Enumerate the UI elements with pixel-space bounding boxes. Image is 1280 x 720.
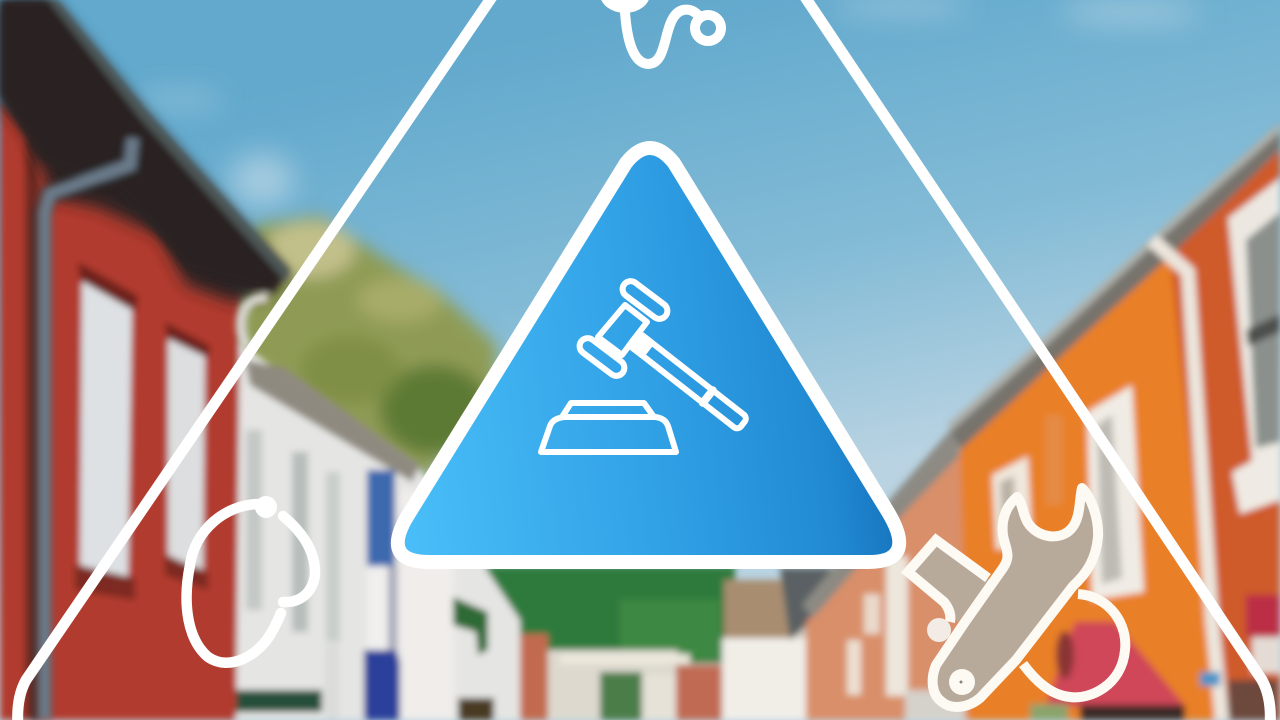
sound block base <box>541 417 676 452</box>
right houses: red-orange wall <box>1170 150 1280 720</box>
blue door upper <box>367 470 395 566</box>
wrench hole <box>949 669 975 695</box>
sound block top <box>562 403 654 417</box>
icon: judge's gavel <box>541 278 748 452</box>
distant street, pale buildings <box>548 650 678 720</box>
wrench body <box>933 488 1098 707</box>
gavel head upper cap <box>619 278 671 322</box>
white distant building <box>722 638 810 720</box>
red awning <box>1046 622 1185 706</box>
right houses: middle window <box>1087 385 1144 600</box>
right houses: window sill box <box>1232 445 1280 514</box>
small blob under screwdriver <box>927 618 951 642</box>
left roof dark <box>0 0 285 292</box>
street base behind distant buildings <box>480 600 860 720</box>
clouds <box>135 0 1200 206</box>
left red window reveals <box>78 262 138 312</box>
left white house roof <box>245 360 420 482</box>
green window box <box>453 597 488 655</box>
white house front further down <box>400 490 454 720</box>
left white elbow pipe <box>241 298 268 348</box>
right houses: orange wall <box>960 254 1225 720</box>
left red house wall <box>0 100 240 720</box>
left white house windows <box>246 430 262 610</box>
right houses: upper window <box>1228 178 1280 462</box>
left roof edge <box>48 0 290 282</box>
tall plaster pilaster on wall <box>1045 415 1063 505</box>
brown distant building <box>724 580 790 638</box>
right houses: drainpipe <box>1152 240 1222 720</box>
icon: stethoscope at top <box>600 0 721 64</box>
left red house window sills <box>75 565 135 600</box>
dark distant roof <box>780 568 880 640</box>
right houses: small window <box>992 456 1032 550</box>
screwdriver handle arc <box>1023 594 1125 697</box>
left red house windows <box>80 272 132 578</box>
navy entry step <box>364 650 420 720</box>
left white house wall <box>235 340 520 720</box>
tree <box>235 215 497 480</box>
gavel head lower cap <box>576 335 628 379</box>
right houses: salmon lower wall <box>806 450 975 720</box>
lower white strips on salmon wall <box>886 556 908 696</box>
door lower panel <box>367 566 395 650</box>
dark band inside wall <box>25 140 39 720</box>
right houses: red sign and white band <box>1246 595 1280 637</box>
distant green trees <box>485 566 735 663</box>
left red house drainpipe <box>42 138 133 720</box>
screwdriver shaft <box>908 540 990 622</box>
second house roof <box>802 428 960 618</box>
icon: wrench and screwdriver at lower right <box>908 488 1125 707</box>
main roof and eaves <box>948 122 1280 450</box>
dark green porch <box>230 690 322 712</box>
shadow under roof <box>0 0 285 302</box>
gavel handle <box>629 333 748 430</box>
icon: stethoscope at lower left <box>187 496 315 663</box>
gavel head body <box>598 305 647 355</box>
central blue triangle panel <box>398 148 899 562</box>
